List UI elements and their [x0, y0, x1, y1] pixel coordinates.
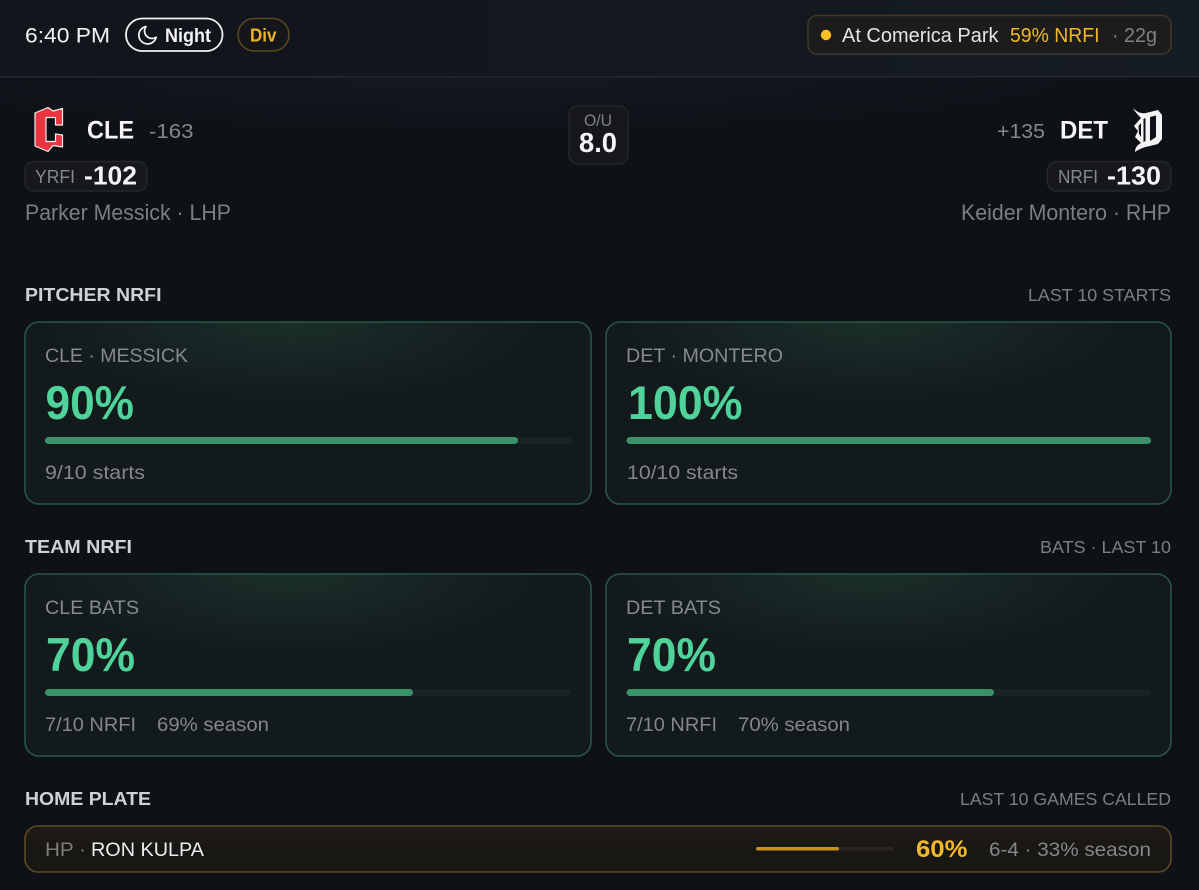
umpire role: HP · [45, 839, 86, 861]
percentage: 70% [627, 628, 716, 681]
percentage: 60% [916, 836, 968, 863]
percentage: 70% [46, 628, 135, 681]
night badge [126, 18, 222, 51]
YRFI odds pill: -102 [84, 160, 137, 190]
icon: Detroit D logo [1133, 108, 1162, 152]
caption: last 10 games called: LAST 10 GAMES CALLED [960, 789, 1171, 809]
YRFI odds pill [25, 160, 147, 191]
sample size: 9/10 starts [45, 462, 145, 484]
sample size: 10/10 starts [627, 462, 738, 484]
caption: bats last 10: BATS · LAST 10 [1040, 537, 1171, 557]
card label: CLE BATS [45, 597, 139, 619]
over under box: 8.0 [579, 127, 617, 158]
ballpark stat pill: At Comerica Park [842, 25, 999, 47]
last 10 record: 7/10 NRFI [626, 714, 717, 736]
panel: DET bats [606, 574, 1171, 756]
percentage: 90% [46, 376, 134, 429]
panel: home plate umpire [25, 826, 1171, 872]
card label: CLE · MESSICK [45, 345, 188, 367]
heading: team NRFI: TEAM NRFI [25, 536, 132, 557]
team abbreviation: DET [1060, 116, 1108, 144]
night badge: Night [165, 26, 212, 47]
panel: CLE Messick [25, 322, 591, 504]
ballpark stat pill: · 22g [1112, 25, 1157, 47]
percentage: 100% [628, 376, 742, 429]
season rate: 70% season [738, 714, 850, 736]
starting pitcher: Keider Montero · RHP [961, 200, 1171, 225]
division badge: Div [250, 26, 276, 46]
header bar [0, 0, 1199, 78]
umpire name: RON KULPA [91, 839, 204, 861]
division badge [238, 18, 289, 51]
record and season rate: 6-4 · 33% season [989, 839, 1151, 861]
last 10 record: 7/10 NRFI [45, 714, 136, 736]
progress bar [756, 847, 894, 850]
progress bar [45, 437, 571, 444]
card label: DET · MONTERO [626, 345, 783, 367]
away team: Cleveland [25, 108, 231, 225]
NRFI odds pill: NRFI [1058, 167, 1098, 187]
card label: DET BATS [626, 597, 721, 619]
moneyline: -163 [149, 120, 194, 143]
season rate: 69% season [157, 714, 269, 736]
home team: Detroit [961, 108, 1171, 225]
NRFI odds pill [1048, 160, 1171, 191]
heading: home plate: HOME PLATE [25, 788, 151, 809]
game time: 6:40 PM [25, 24, 110, 48]
over under box [569, 106, 628, 164]
heading: pitcher NRFI: PITCHER NRFI [25, 284, 162, 305]
team abbreviation: CLE [87, 116, 134, 144]
starting pitcher: Parker Messick · LHP [25, 200, 231, 225]
progress bar [626, 437, 1151, 444]
YRFI odds pill: YRFI [35, 167, 75, 187]
icon: Cleveland C logo [35, 108, 62, 152]
NRFI odds pill: -130 [1107, 160, 1161, 190]
panel: CLE bats [25, 574, 591, 756]
over under box: O/U [584, 111, 612, 130]
ballpark stat pill [808, 16, 1171, 54]
moneyline: +135 [997, 120, 1045, 143]
progress bar [626, 689, 1151, 696]
icon: moon [139, 26, 156, 44]
ballpark stat pill: 59% NRFI [1010, 25, 1100, 47]
panel: DET Montero [606, 322, 1171, 504]
progress bar [45, 689, 571, 696]
caption: last 10 starts: LAST 10 STARTS [1028, 285, 1171, 305]
